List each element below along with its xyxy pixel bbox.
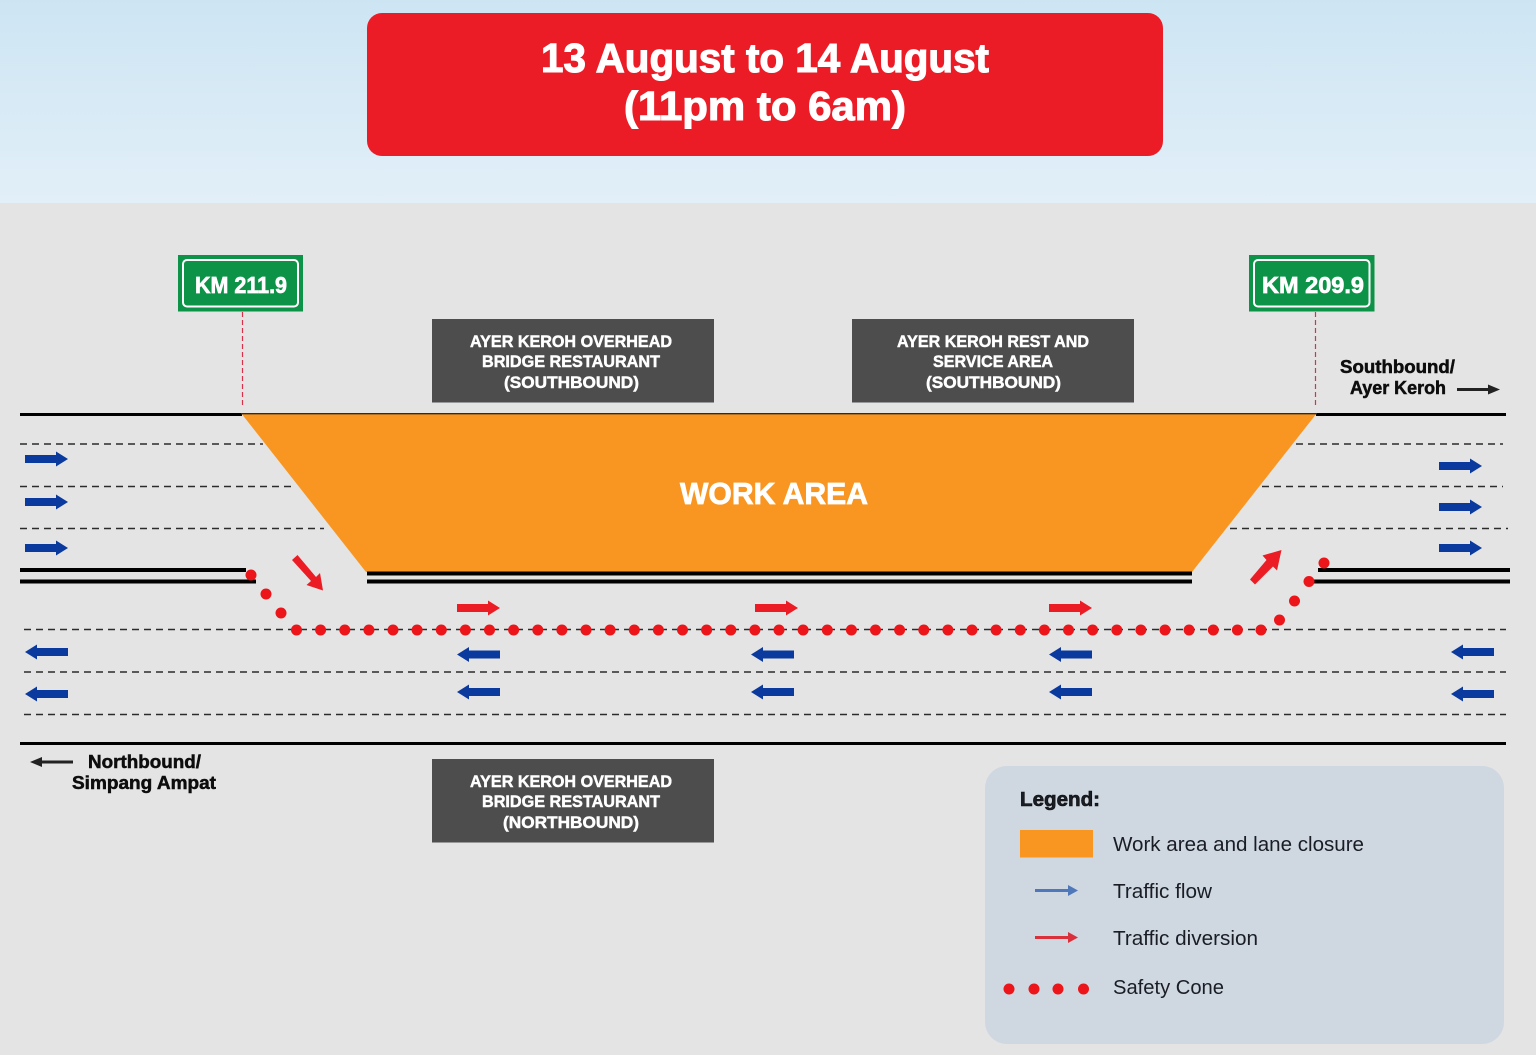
label: overhead bridge restaurant southbound: AYER KEROH OVERHEAD bbox=[470, 332, 672, 351]
KM 211.9 marker: KM 211.9 bbox=[195, 272, 287, 298]
label: overhead bridge restaurant southbound bbox=[432, 319, 714, 402]
direction label: northbound: Simpang Ampat bbox=[72, 773, 216, 793]
work area: WORK AREA bbox=[680, 476, 868, 511]
legend item: safety cone: Safety Cone bbox=[1113, 977, 1224, 999]
direction label: southbound: Southbound/ bbox=[1340, 357, 1455, 377]
traffic flow arrows: northbound carriageway bbox=[25, 644, 1494, 702]
KM 209.9 marker: KM 209.9 bbox=[1262, 272, 1364, 298]
label: rest and service area southbound bbox=[852, 319, 1134, 402]
label: overhead bridge restaurant northbound bbox=[432, 759, 714, 842]
traffic diversion arrows bbox=[292, 550, 1282, 616]
label: rest and service area southbound: (SOUTHBOUND) bbox=[926, 373, 1061, 392]
direction label: northbound bbox=[30, 752, 216, 793]
label: rest and service area southbound: AYER KEROH REST AND bbox=[897, 332, 1089, 351]
traffic flow arrows: southbound carriageway bbox=[25, 452, 1482, 556]
title banner: (11pm to 6am) bbox=[624, 83, 906, 129]
label: overhead bridge restaurant northbound: AYER KEROH OVERHEAD bbox=[470, 772, 672, 791]
label: rest and service area southbound: SERVICE AREA bbox=[933, 352, 1053, 371]
legend item: work area bbox=[1020, 830, 1364, 858]
work area bbox=[241, 413, 1317, 572]
title banner: 13 August to 14 August bbox=[541, 35, 989, 81]
legend item: traffic flow: Traffic flow bbox=[1113, 881, 1213, 903]
KM 211.9 marker bbox=[178, 255, 303, 407]
legend item: safety cone bbox=[1004, 977, 1224, 999]
legend heading: Legend: bbox=[1020, 789, 1100, 811]
legend item: traffic diversion bbox=[1035, 928, 1258, 950]
label: overhead bridge restaurant northbound: BRIDGE RESTAURANT bbox=[482, 792, 661, 811]
direction label: southbound: Ayer Keroh bbox=[1350, 378, 1446, 398]
safety cones bbox=[246, 558, 1330, 636]
road solid edge lines bbox=[20, 414, 1510, 744]
legend panel bbox=[985, 766, 1504, 1044]
median double line at work area bbox=[367, 574, 1192, 582]
label: overhead bridge restaurant northbound: (NORTHBOUND) bbox=[503, 813, 639, 832]
legend item: traffic flow bbox=[1035, 881, 1213, 903]
KM 209.9 marker bbox=[1249, 255, 1374, 407]
title banner bbox=[367, 13, 1163, 156]
lane dashed lines bbox=[20, 444, 1508, 714]
direction label: southbound bbox=[1340, 357, 1500, 398]
direction label: northbound: Northbound/ bbox=[88, 752, 201, 772]
legend item: traffic diversion: Traffic diversion bbox=[1113, 928, 1258, 950]
legend item: work area: Work area and lane closure bbox=[1113, 834, 1364, 856]
header background bbox=[0, 0, 1536, 203]
label: overhead bridge restaurant southbound: BRIDGE RESTAURANT bbox=[482, 352, 661, 371]
label: overhead bridge restaurant southbound: (SOUTHBOUND) bbox=[504, 373, 639, 392]
